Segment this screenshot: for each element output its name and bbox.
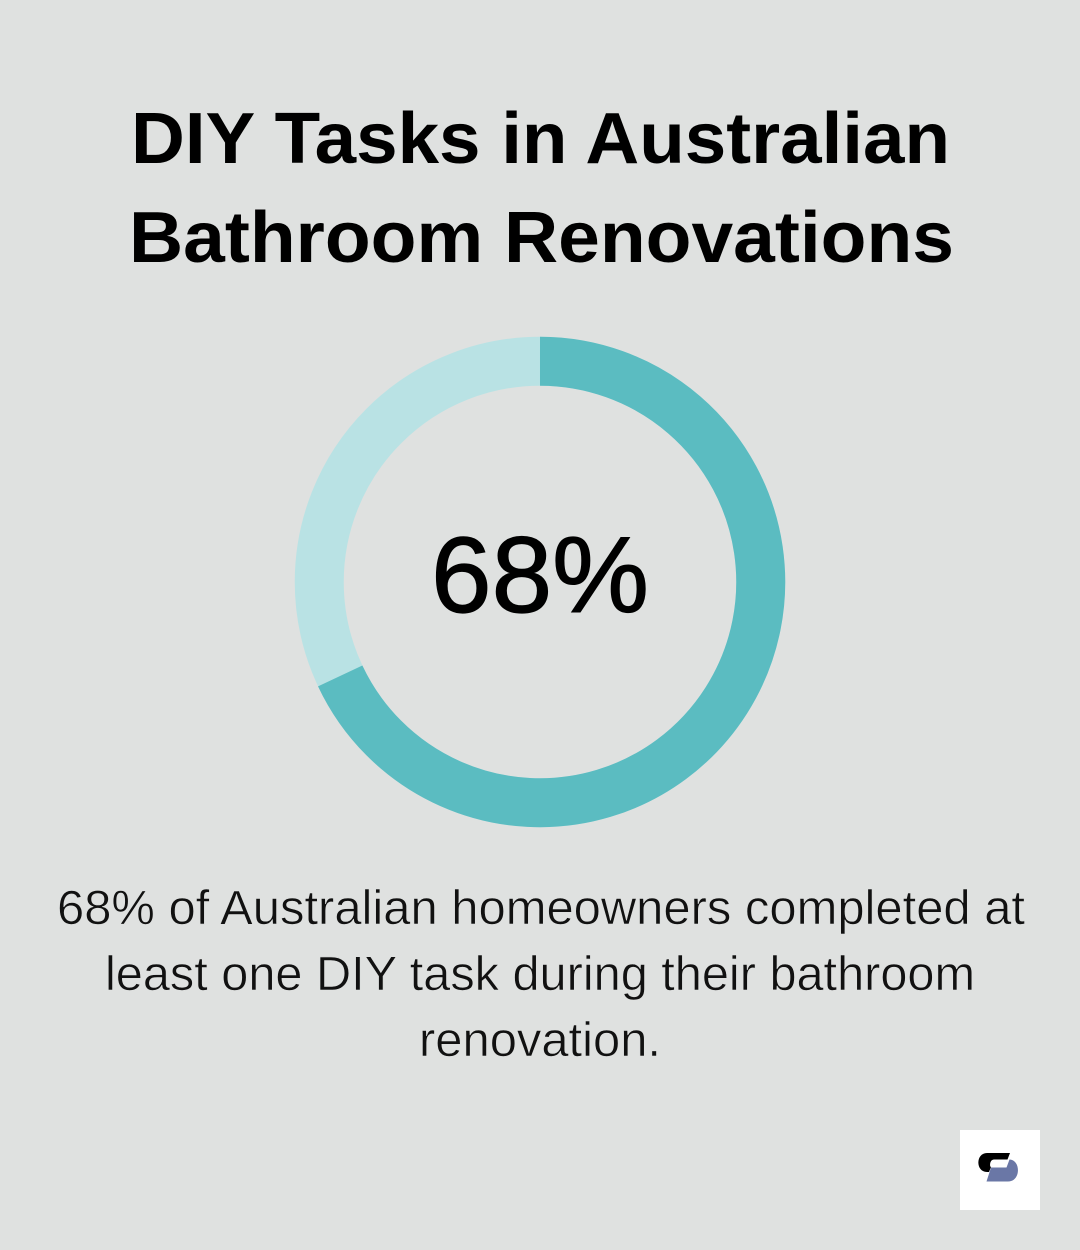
donut value: 68% — [431, 514, 649, 635]
logo badge — [960, 1130, 1040, 1210]
title — [129, 99, 954, 278]
description text: least one DIY task during their bathroom — [105, 948, 975, 1001]
description text — [57, 882, 1025, 1067]
description text: renovation. — [419, 1014, 661, 1067]
donut chart: 68% — [319, 361, 761, 803]
description text: 68% of Australian homeowners completed at — [57, 882, 1025, 935]
title: DIY Tasks in Australian — [131, 99, 950, 179]
title: Bathroom Renovations — [129, 198, 954, 278]
icon: logo mark — [978, 1153, 1018, 1182]
